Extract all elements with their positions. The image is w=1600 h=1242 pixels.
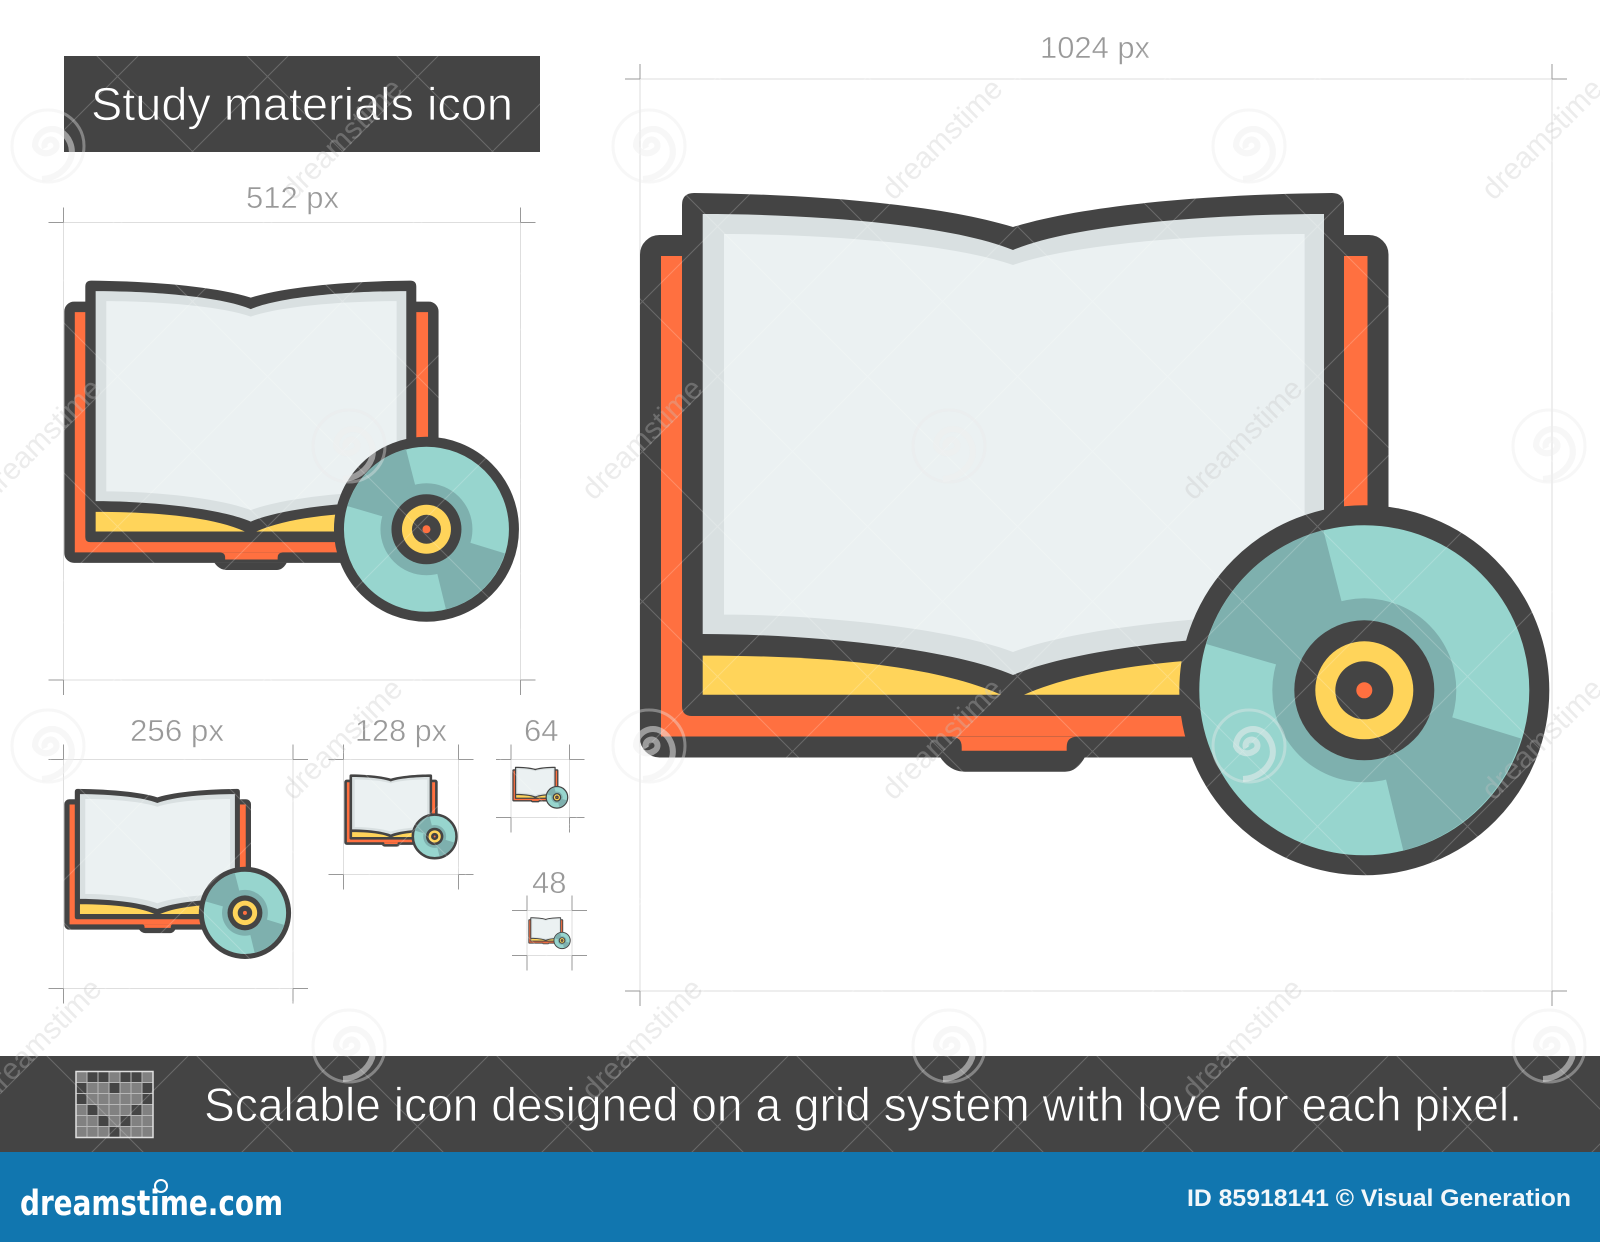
guide frame: 128 px bbox=[328, 744, 474, 890]
watermark overlay: dreamstime bbox=[875, 72, 1009, 206]
watermark overlay: dreamstime bbox=[875, 672, 1009, 806]
icon: book and disc, 48 px bbox=[529, 917, 570, 949]
guide frame: 256 px bbox=[48, 744, 308, 1004]
footer logo: dreamstime.com bbox=[20, 1184, 283, 1224]
icon: book and disc, 64 px bbox=[513, 767, 568, 808]
title banner: Study materials icon bbox=[91, 78, 513, 130]
watermark overlay: dreamstime bbox=[1175, 972, 1309, 1106]
label: 48: 48 bbox=[532, 865, 566, 900]
guide frame: 1024 px bbox=[625, 64, 1567, 1006]
watermark overlay: dreamstime bbox=[275, 72, 409, 206]
icon: pixel grid bbox=[76, 1072, 153, 1138]
caption text: Scalable icon designed on a grid system with love for each pixel. bbox=[204, 1078, 1522, 1131]
label: 128 px: 128 px bbox=[355, 713, 447, 748]
label: 64: 64 bbox=[524, 713, 558, 748]
watermark overlay: dreamstime bbox=[275, 672, 409, 806]
label: 1024 px: 1024 px bbox=[1040, 30, 1150, 65]
icon: book and disc, 128 px bbox=[346, 774, 457, 858]
icon: book and disc, 256 px bbox=[67, 789, 289, 957]
watermark overlay: dreamstime bbox=[1175, 372, 1309, 506]
label: 512 px: 512 px bbox=[246, 180, 339, 215]
footer credit: ID 85918141 © Visual Generation bbox=[1187, 1185, 1571, 1212]
watermark overlay: dreamstime bbox=[575, 372, 709, 506]
guide frame: 48 px bbox=[512, 896, 587, 970]
label: 256 px: 256 px bbox=[130, 713, 225, 748]
footer band bbox=[0, 1152, 1600, 1242]
guide frame: 64 px bbox=[496, 744, 584, 832]
icon: book and disc, 512 px bbox=[70, 281, 514, 617]
icon: book and disc, 1024 px bbox=[650, 193, 1539, 865]
title banner bbox=[64, 56, 540, 152]
watermark overlay: dreamstime bbox=[575, 972, 709, 1106]
caption band bbox=[0, 1056, 1600, 1152]
guide frame: 512 px bbox=[48, 208, 536, 695]
